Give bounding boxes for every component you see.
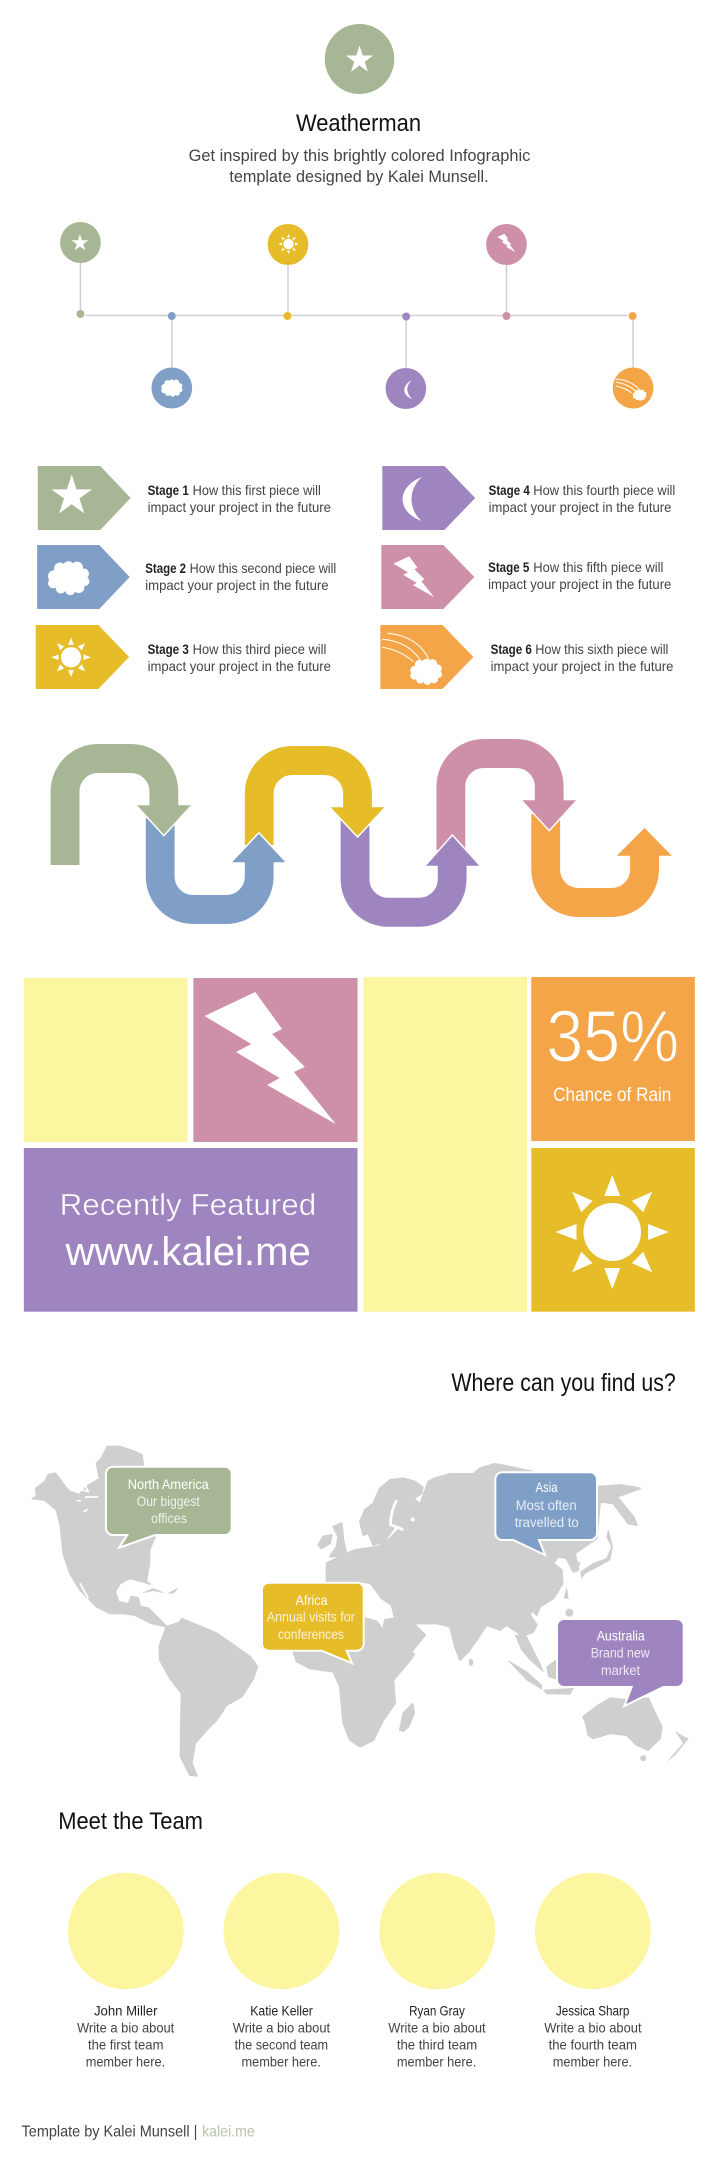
callout: asia: Most often: [516, 1497, 577, 1513]
winding arrows: [65, 754, 672, 912]
stage 3: Stage 3: [148, 642, 189, 657]
heading: meet the team: Meet the Team: [58, 1808, 203, 1835]
stage 4: impact your project in the future: [489, 500, 671, 515]
callout: north america: Our biggest: [137, 1493, 200, 1509]
team member: Jessica Sharp: member here.: [553, 2055, 632, 2070]
stage 2: [37, 545, 336, 609]
tile: recently featured: www.kalei.me: [65, 1230, 311, 1274]
arrow: yellow: [259, 760, 385, 845]
stage 2: Stage 2: [145, 561, 186, 576]
stage 3: How this third piece will: [193, 642, 326, 657]
icon: header star badge: [325, 24, 394, 94]
team member: John Miller: Write a bio about: [77, 2021, 175, 2036]
intro text: template designed by Kalei Munsell.: [229, 168, 489, 186]
stage 6: Stage 6: [491, 642, 532, 657]
timeline node: meteor: [613, 312, 653, 408]
tile: chance of rain: 35%: [546, 996, 679, 1078]
heading: where can you find us: Where can you find us?: [451, 1369, 676, 1397]
team member: Ryan Gray: member here.: [397, 2055, 476, 2070]
team member: Ryan Gray: Ryan Gray: [409, 2004, 465, 2019]
stage 5: How this fifth piece will: [533, 560, 663, 575]
callout: australia: Brand new: [591, 1645, 650, 1661]
tile: recently featured: Recently Featured: [60, 1187, 316, 1222]
stage 5: [381, 545, 671, 609]
intro text: Get inspired by this brightly colored Infographic: [189, 147, 530, 165]
stage 4: Stage 4: [489, 483, 530, 498]
callout: asia: Asia: [536, 1479, 558, 1495]
callout: africa: Africa: [296, 1592, 328, 1608]
lower sections: [22, 1808, 651, 2141]
stage 4: [382, 466, 675, 530]
team member: Katie Keller: [224, 1873, 339, 2070]
timeline node: moon: [386, 312, 426, 409]
tile: yellow placeholder: [24, 978, 187, 1142]
stage 3: [36, 625, 331, 689]
timeline node: sun: [268, 224, 308, 320]
timeline node: star: [60, 222, 101, 318]
tile: lightning: [193, 978, 358, 1142]
callout: africa: [262, 1583, 364, 1663]
stage 6: [380, 625, 673, 689]
team member: John Miller: member here.: [86, 2055, 165, 2070]
team member: Ryan Gray: Write a bio about: [388, 2021, 486, 2036]
footer credit: Template by Kalei Munsell |: [22, 2124, 197, 2141]
callout: africa: Annual visits for: [267, 1609, 355, 1625]
tile: recently featured: [24, 1148, 358, 1312]
stage 6: impact your project in the future: [491, 659, 673, 674]
team member: Katie Keller: Katie Keller: [250, 2004, 313, 2019]
footer credit: kalei.me: [202, 2124, 255, 2141]
team member: Jessica Sharp: Write a bio about: [544, 2021, 642, 2036]
upper sections: [24, 24, 695, 1397]
callout: north america: offices: [151, 1510, 187, 1526]
team member: Katie Keller: Write a bio about: [233, 2021, 330, 2036]
intro text: [189, 147, 530, 186]
callout: north america: [106, 1467, 232, 1548]
stage 6: How this sixth piece will: [535, 642, 668, 657]
timeline node: lightning: [486, 224, 527, 320]
stage 4: How this fourth piece will: [533, 483, 675, 498]
team member: John Miller: John Miller: [94, 2004, 158, 2019]
callout: asia: travelled to: [515, 1514, 579, 1530]
tile: chance of rain: Chance of Rain: [553, 1085, 671, 1106]
stage 3: impact your project in the future: [148, 659, 331, 674]
arrow: pink: [451, 754, 577, 850]
callout: asia: [495, 1472, 597, 1555]
team member: Ryan Gray: [379, 1873, 495, 2070]
team member: Ryan Gray: the third team: [397, 2038, 477, 2053]
team member: Katie Keller: the second team: [235, 2038, 328, 2053]
tile: chance of rain: [531, 977, 695, 1141]
callout: australia: [557, 1619, 684, 1706]
callout: north america: North America: [128, 1476, 209, 1492]
stage 1: How this first piece will: [193, 483, 321, 498]
team member: Jessica Sharp: the fourth team: [549, 2038, 637, 2053]
stage 2: impact your project in the future: [145, 578, 329, 593]
arrow: blue: [160, 818, 286, 910]
stage 1: impact your project in the future: [148, 500, 331, 515]
team member: Jessica Sharp: Jessica Sharp: [556, 2004, 629, 2019]
callout: africa: conferences: [278, 1626, 344, 1642]
timeline: [60, 222, 653, 409]
team member: John Miller: the first team: [88, 2038, 163, 2053]
world map: [33, 1447, 688, 1776]
arrow: orange: [546, 814, 672, 902]
team member: Katie Keller: member here.: [242, 2055, 321, 2070]
team member: Jessica Sharp: [535, 1873, 651, 2070]
callout: australia: market: [601, 1662, 640, 1678]
tile: tall yellow placeholder: [363, 977, 527, 1312]
stage 5: impact your project in the future: [488, 577, 671, 592]
tile: sun: [531, 1148, 695, 1312]
callout: australia: Australia: [597, 1627, 645, 1643]
timeline node: cloud: [151, 312, 192, 408]
stage 5: Stage 5: [488, 560, 530, 575]
arrow: green: [65, 758, 192, 865]
stage 1: [38, 466, 331, 530]
title: Weatherman: [296, 110, 421, 137]
stage 1: Stage 1: [148, 483, 189, 498]
team member: John Miller: [68, 1873, 184, 2070]
stage 2: How this second piece will: [190, 561, 336, 576]
arrow: purple: [355, 820, 480, 912]
